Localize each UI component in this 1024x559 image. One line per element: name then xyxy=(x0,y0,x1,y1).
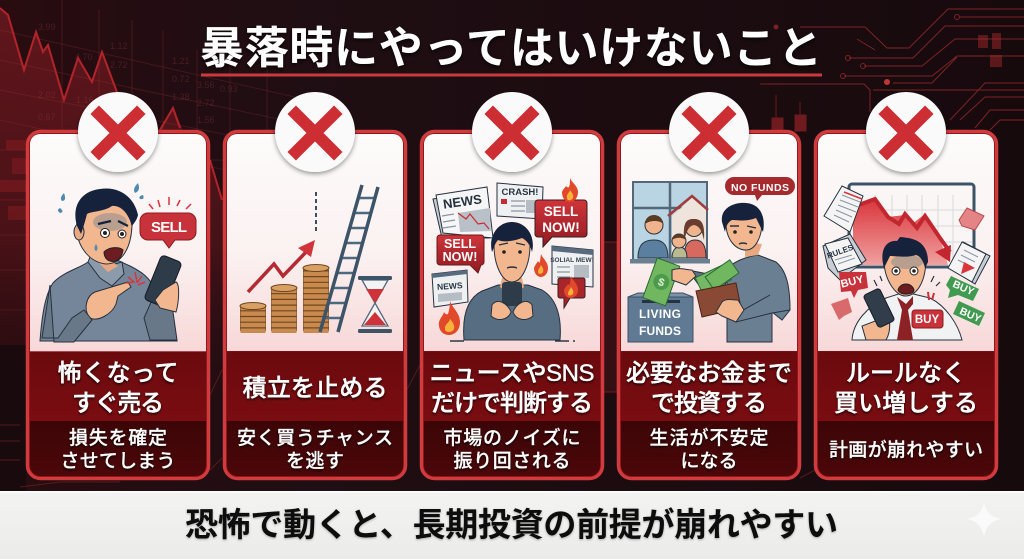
background: dark red stock chart and circuit pattern: 0.72 xyxy=(172,74,190,84)
illustration: panicking man with phone and SELL bubble xyxy=(40,183,196,342)
title: 暴落時にやってはいけないこと: 暴落時にやってはいけないこと xyxy=(200,24,822,73)
card subtitle: を逃す xyxy=(286,450,344,472)
footer banner xyxy=(0,491,1024,559)
background: dark red stock chart and circuit pattern: 1.16 xyxy=(76,95,94,105)
illustration: man overwhelmed by news and SNS: NEWS xyxy=(442,191,483,212)
illustration: man overwhelmed by news and SNS: NOW! xyxy=(542,220,580,235)
illustration: family window, living funds box, man with wallet: NO FUNDS xyxy=(731,182,789,194)
card title: 必要なお金まで xyxy=(626,360,792,387)
illustration: man overwhelmed by news and SNS: SOLIAL MEW! xyxy=(550,257,594,264)
illustration: man overwhelmed by news and SNS: CRASH! xyxy=(502,187,538,198)
background: dark red stock chart and circuit pattern: 1.38 xyxy=(172,92,190,102)
card subtitle xyxy=(60,427,176,472)
card subtitle xyxy=(650,427,768,472)
card title xyxy=(626,360,792,417)
illustration: family window, living funds box, man with wallet: LIVING xyxy=(639,307,681,321)
card subtitle: 振り回される xyxy=(454,450,570,472)
card title: すぐ売る xyxy=(72,390,164,417)
illustration: panicking man buying in front of falling chart: BUY xyxy=(840,273,866,291)
panel: 積立を止める xyxy=(224,132,406,478)
card title: 積立を止める xyxy=(242,375,388,402)
card title: 買い増しする xyxy=(834,390,978,417)
panel: ニュースやSNSだけで判断する xyxy=(422,132,602,478)
illustration: panicking man buying in front of falling chart: BUY xyxy=(951,278,976,298)
illustration: panicking man buying in front of falling chart: BUY xyxy=(958,305,983,325)
card subtitle: 計画が崩れやすい xyxy=(829,439,983,461)
card subtitle: 安く買うチャンス xyxy=(237,427,393,449)
illustration: family window, living funds box, man with wallet: FUNDS xyxy=(639,324,681,338)
illustration: man overwhelmed by news and SNS: NOW! xyxy=(443,250,477,264)
card subtitle: させてしまう xyxy=(60,450,176,472)
illustration: panicking man with phone and SELL bubble: SELL xyxy=(151,219,187,236)
icon: red X badge 4 xyxy=(669,92,749,172)
card subtitle xyxy=(444,426,580,472)
icon: red X badge 1 xyxy=(78,92,158,172)
card subtitle: 損失を確定 xyxy=(69,427,167,449)
background: dark red stock chart and circuit pattern: 3.99 xyxy=(38,22,56,32)
background: dark red stock chart and circuit pattern: 2.02 xyxy=(38,90,56,100)
illustration: man overwhelmed by news and SNS: NEWS xyxy=(437,280,463,292)
icon: red X badge 2 xyxy=(275,92,355,172)
card subtitle: になる xyxy=(680,450,738,472)
card subtitle xyxy=(237,427,393,472)
card title: だけで判断する xyxy=(431,390,593,417)
background: dark red stock chart and circuit pattern: 3.56 xyxy=(197,80,215,90)
background: dark red stock chart and circuit pattern: 1.56 xyxy=(197,115,215,125)
illustration: panicking man buying in front of falling chart xyxy=(823,184,990,340)
panel: 怖くなってすぐ売る xyxy=(28,132,208,478)
footer message: 恐怖で動くと、長期投資の前提が崩れやすい xyxy=(185,506,838,543)
illustration: panicking man buying in front of falling chart: BUY xyxy=(915,314,939,326)
card subtitle: 生活が不安定 xyxy=(650,427,768,449)
background: dark red stock chart and circuit pattern: 1.21 xyxy=(172,56,190,66)
card title xyxy=(58,360,178,417)
illustration: panicking man buying in front of falling chart: RULES xyxy=(826,243,855,261)
background: dark red stock chart and circuit pattern: 2.72 xyxy=(197,98,215,108)
illustration: man overwhelmed by news and SNS: SELL xyxy=(544,204,578,219)
background: dark red stock chart and circuit pattern: 0.93 xyxy=(220,84,238,94)
illustration: coins, rising arrow, ladder and hourglass xyxy=(240,185,392,333)
illustration: man overwhelmed by news and SNS: SELL xyxy=(444,237,476,251)
icon: red X badge 5 xyxy=(866,92,946,172)
icon: red X badge 3 xyxy=(472,92,552,172)
icon: sparkle xyxy=(966,501,1002,537)
background: dark red stock chart and circuit pattern: 0.67 xyxy=(38,112,56,122)
background: dark red stock chart and circuit pattern: 1.12 xyxy=(110,41,128,51)
illustration: family window, living funds box, man with wallet: $ xyxy=(656,276,666,290)
card title: ルールなく xyxy=(846,360,966,387)
card title: で投資する xyxy=(651,390,767,417)
card title xyxy=(834,360,978,417)
illustration: man overwhelmed by news and SNS xyxy=(432,178,594,341)
card title: 怖くなって xyxy=(58,360,178,387)
panel: 必要なお金までで投資する xyxy=(618,132,800,478)
panel: ルールなく買い増しする xyxy=(816,132,996,478)
card subtitle: 市場のノイズに xyxy=(444,426,580,449)
illustration: family window, living funds box, man with wallet xyxy=(628,177,795,342)
card title: ニュースやSNS xyxy=(430,360,594,387)
background: dark red stock chart and circuit pattern: 4.70 xyxy=(75,52,93,62)
card title xyxy=(430,360,594,417)
background: dark red stock chart and circuit pattern: 2.72 xyxy=(110,60,128,70)
